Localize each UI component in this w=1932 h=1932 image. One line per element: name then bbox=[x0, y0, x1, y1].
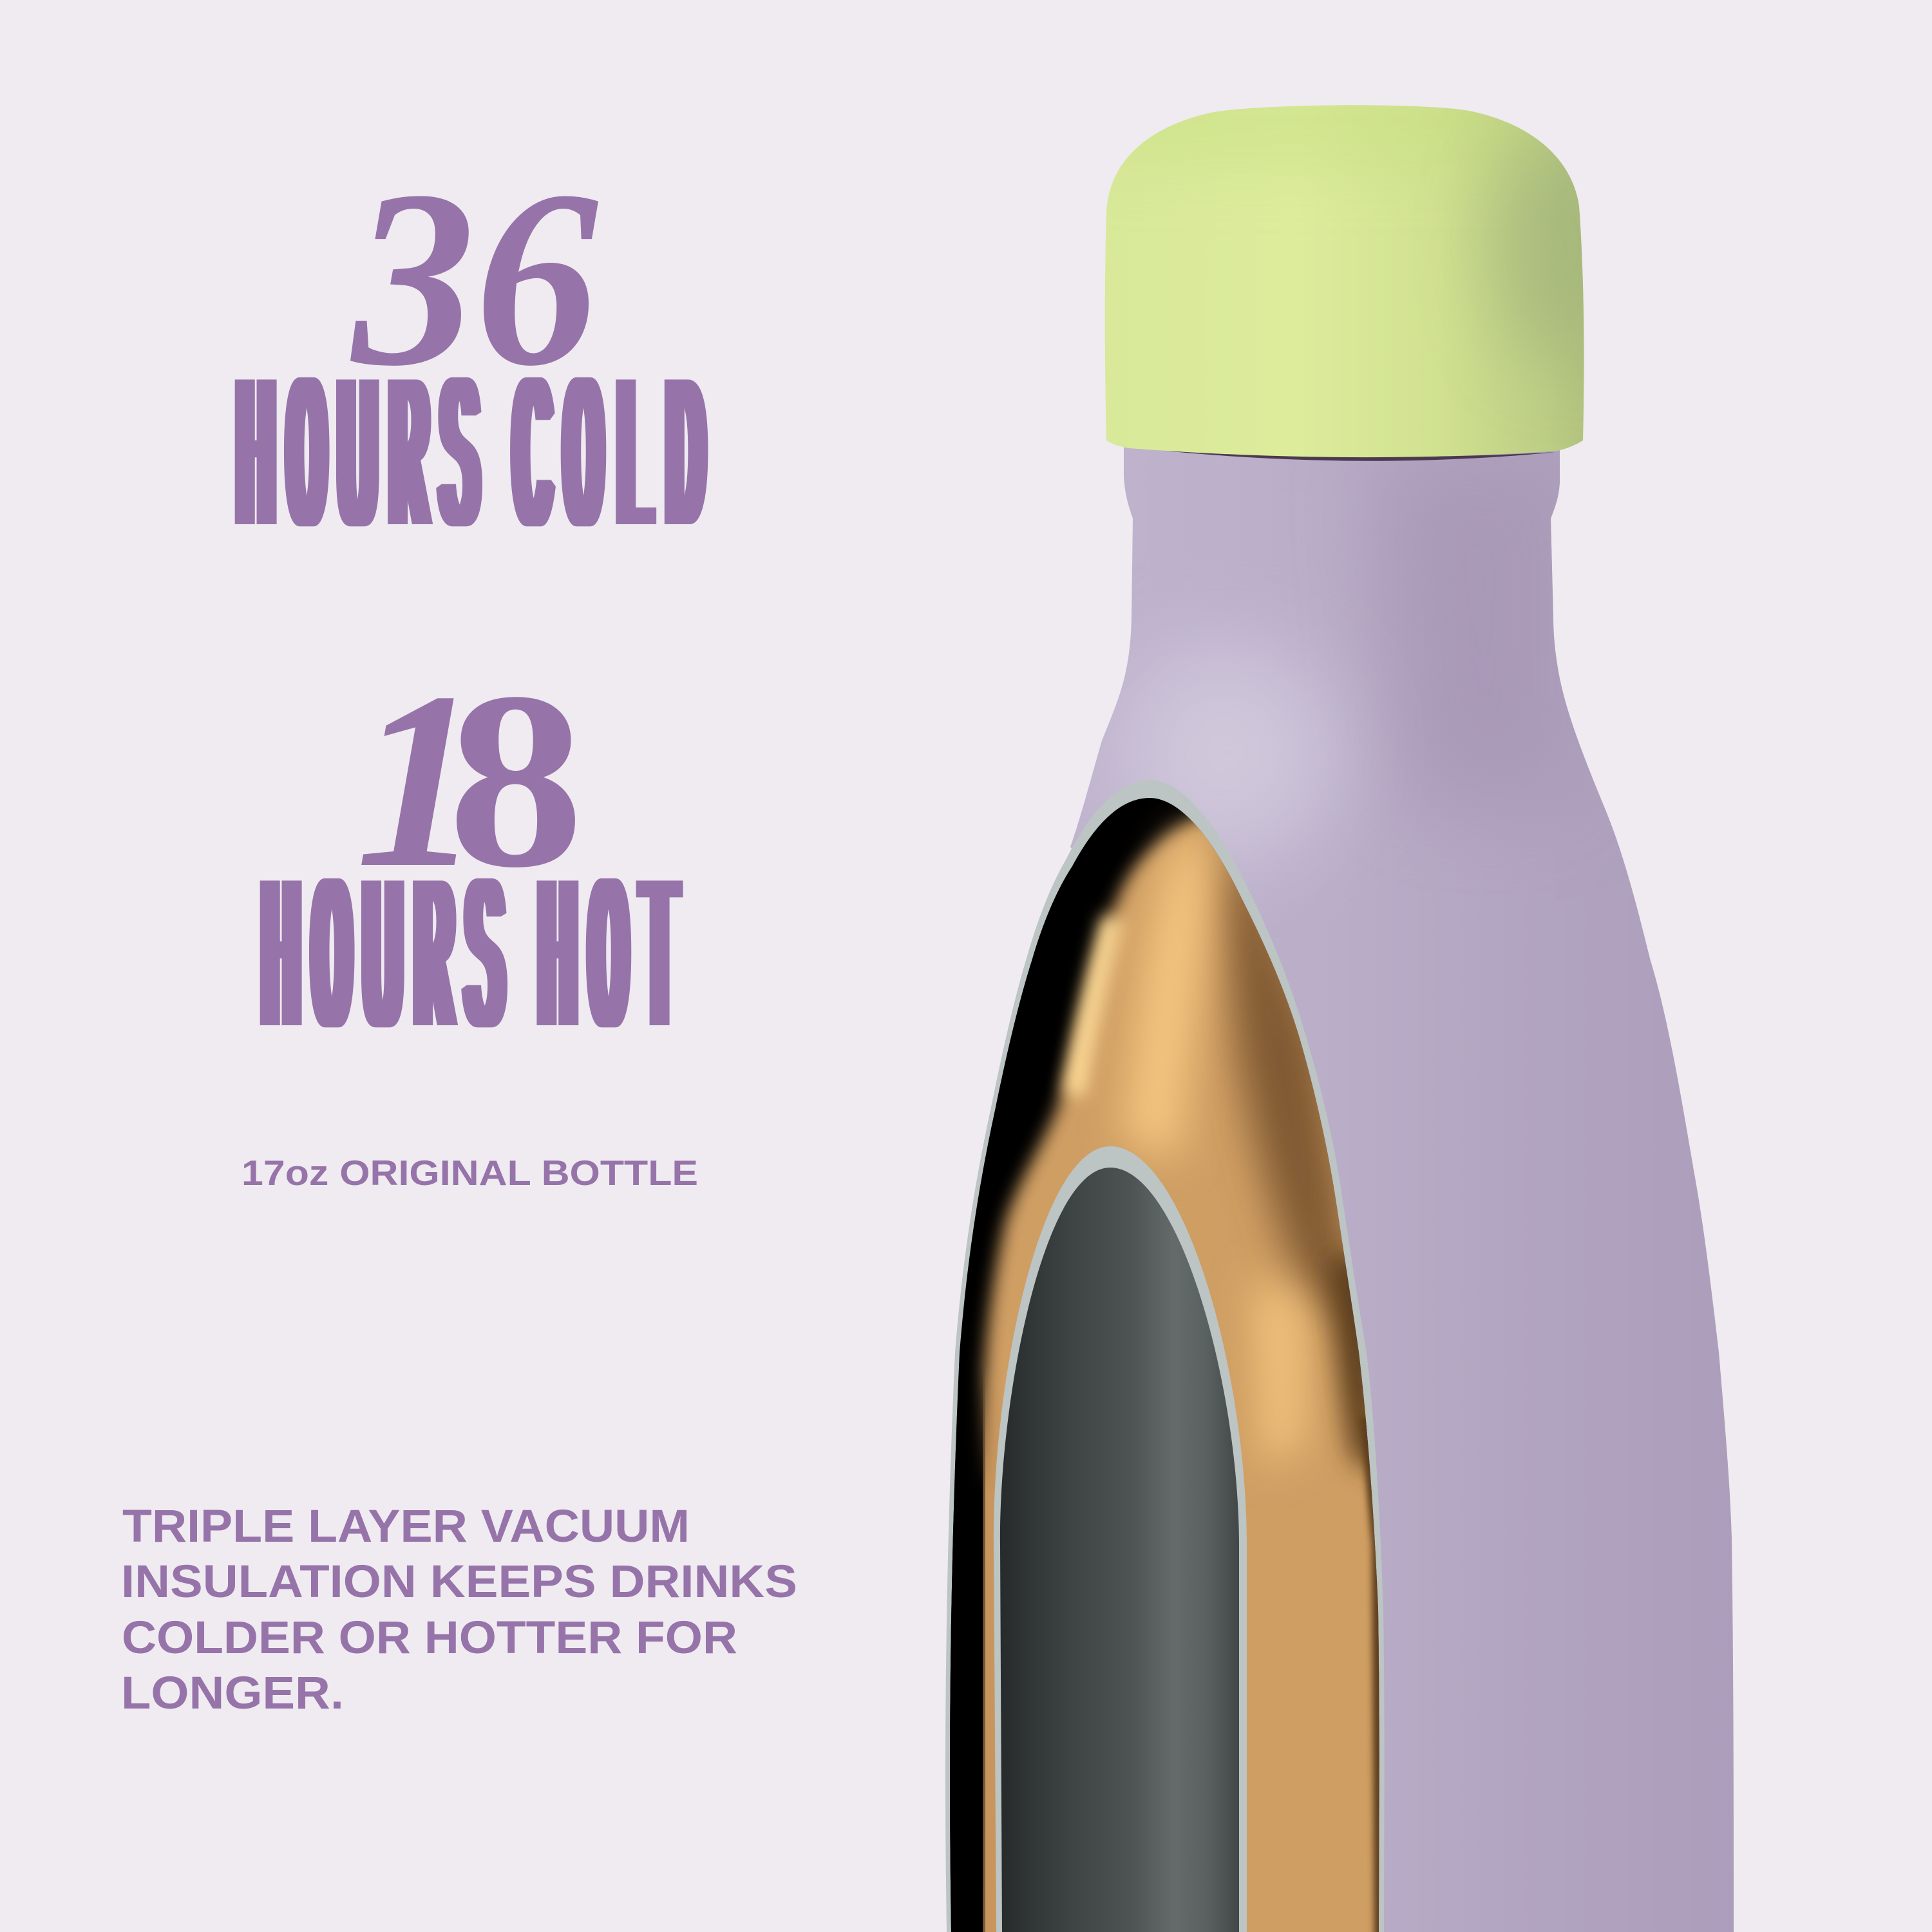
copper right shadow bbox=[1217, 831, 1359, 1327]
copper bright streak bbox=[1074, 918, 1113, 1095]
copper wall bbox=[983, 773, 1417, 1932]
heading: hours hot: HOURS HOT bbox=[262, 843, 692, 1092]
number 18: 8 bbox=[448, 640, 584, 920]
heading: hours cold: HOURS COLD bbox=[237, 342, 717, 591]
cutaway: outer rim bbox=[945, 780, 1385, 1932]
inner tube: dark interior bbox=[1000, 1168, 1239, 1932]
cap bbox=[1105, 105, 1584, 457]
copper right edge dark line bbox=[1360, 1417, 1391, 1932]
cap upper right shading bbox=[1473, 131, 1584, 359]
stat: 18 hours hot bbox=[262, 640, 692, 1092]
cutaway: interior copper layer bbox=[950, 798, 1379, 1932]
inner tube: rim bbox=[994, 1146, 1247, 1932]
description text block: INSULATION KEEPS DRINKS bbox=[121, 1557, 797, 1607]
description text block: LONGER. bbox=[121, 1668, 344, 1719]
label: bottle size: 17oz ORIGINAL BOTTLE bbox=[242, 1153, 698, 1193]
bottle illustration bbox=[945, 105, 1734, 1932]
description text block bbox=[121, 1501, 797, 1719]
number 18: 1 bbox=[355, 640, 482, 920]
copper left strip bbox=[985, 1378, 996, 1932]
description text block: TRIPLE LAYER VACUUM bbox=[122, 1501, 690, 1552]
copper broad light band bbox=[1124, 828, 1211, 1159]
description text block: COLDER OR HOTTER FOR bbox=[122, 1613, 737, 1663]
bottle body bbox=[1070, 447, 1734, 1932]
body upper right shade bbox=[1372, 451, 1578, 805]
copper lower right dark bbox=[1327, 1256, 1378, 1475]
copper lower highlight bbox=[1256, 1275, 1301, 1468]
gasket line under cap bbox=[1127, 447, 1556, 461]
black left band bbox=[934, 1365, 983, 1932]
cap top shading bbox=[1129, 105, 1539, 156]
stat: 36 hours cold bbox=[237, 138, 717, 591]
infographic canvas bbox=[122, 105, 1734, 1932]
number 36: 36 bbox=[348, 138, 598, 418]
body highlight bbox=[1117, 644, 1336, 863]
